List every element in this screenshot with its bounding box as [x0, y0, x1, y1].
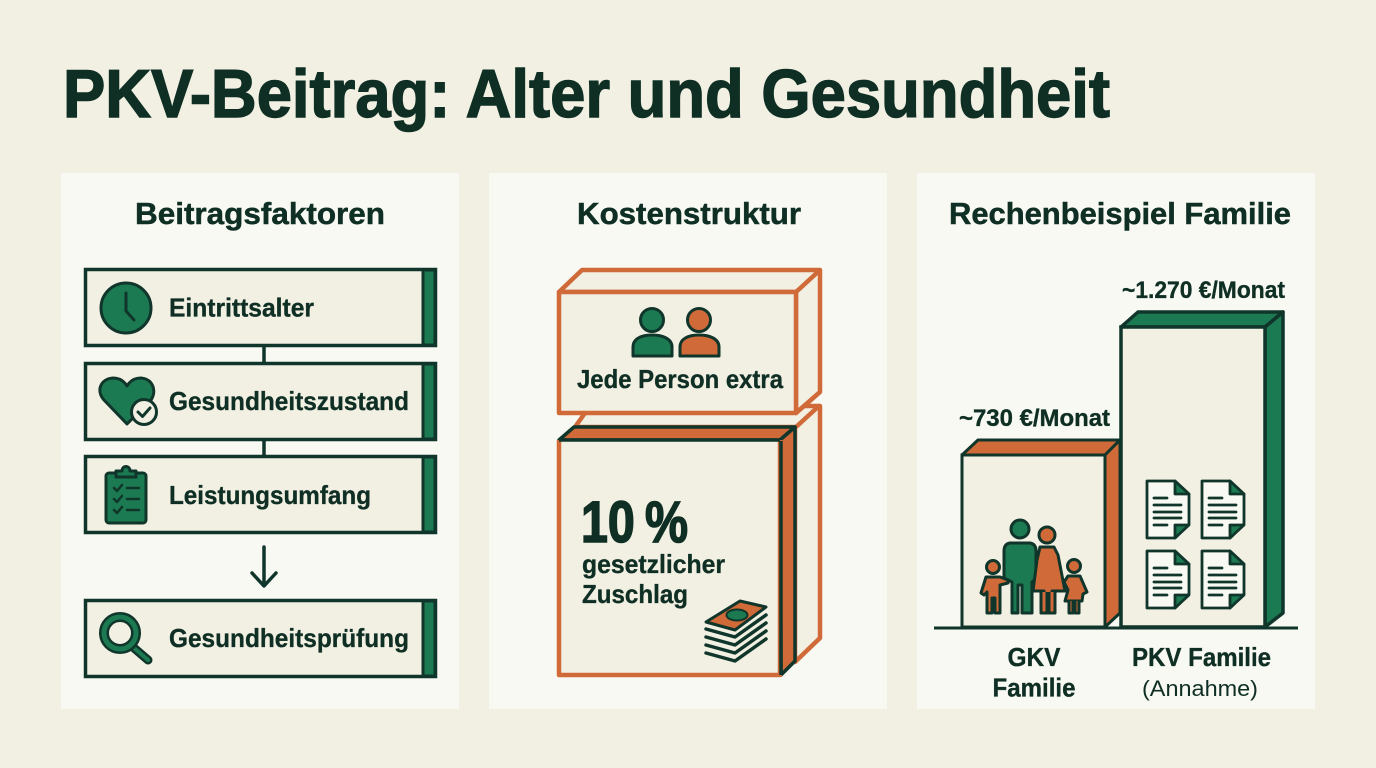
panel: Kostenstruktur: [489, 173, 887, 709]
heading: Kostenstruktur: Kostenstruktur: [577, 196, 801, 231]
icon: magnifier: [104, 617, 148, 660]
value: 10 %: 10 %: [581, 490, 688, 555]
label: GKV Familie: [992, 642, 1076, 702]
label: gesetzlicher Zuschlag: [582, 549, 725, 609]
icon: document top left: [1147, 481, 1189, 538]
icon: document bottom left: [1147, 551, 1189, 608]
icon: money stack: [706, 601, 766, 661]
icon: document bottom right: [1202, 551, 1244, 608]
factor: Gesundheitsprüfung: [86, 600, 436, 676]
icon: clipboard: [106, 466, 146, 523]
label: gesetzlicher Zuschlag: Zuschlag: [582, 579, 688, 609]
label: Gesundheitszustand: [169, 386, 409, 416]
connector lines: [262, 347, 266, 455]
icon: family: [981, 520, 1087, 613]
value: ~1.270 €/Monat: ~1.270 €/Monat: [1122, 277, 1285, 304]
panel: Beitragsfaktoren: [61, 173, 459, 709]
label: Jede Person extra: [577, 364, 783, 394]
arrow: down: [252, 547, 276, 586]
label: GKV Familie: GKV: [1008, 642, 1061, 672]
title: PKV-Beitrag: Alter und Gesundheit: [63, 56, 1110, 132]
factor: Eintrittsalter: [86, 270, 436, 346]
icon: two persons: [633, 308, 719, 356]
panel: Rechenbeispiel Familie: [917, 173, 1315, 709]
icon: heart with check: [100, 378, 156, 424]
label: GKV Familie: Familie: [992, 672, 1076, 702]
upper box: Jede Person extra: [559, 270, 820, 413]
heading: Rechenbeispiel Familie: Rechenbeispiel Familie: [949, 196, 1291, 231]
label: Gesundheitsprüfung: [169, 623, 409, 653]
label: Leistungsumfang: [169, 480, 371, 510]
label: Eintrittsalter: [169, 292, 314, 322]
value: ~730 €/Monat: ~730 €/Monat: [959, 405, 1110, 432]
icon: document top right: [1202, 481, 1244, 538]
icon: clock: [101, 283, 151, 333]
factor: Gesundheitszustand: [86, 364, 436, 440]
chart baseline: [934, 626, 1298, 630]
label: PKV Familie (Annahme): [1132, 642, 1271, 701]
heading: Beitragsfaktoren: Beitragsfaktoren: [135, 196, 385, 231]
bar: PKV: [1121, 277, 1285, 627]
label: PKV Familie (Annahme): PKV Familie: [1132, 642, 1271, 672]
label: gesetzlicher Zuschlag: gesetzlicher: [582, 549, 725, 579]
bar: GKV: [959, 405, 1120, 627]
lower box: 10 % Zuschlag: [559, 405, 820, 675]
label: PKV Familie (Annahme): (Annahme): [1142, 676, 1258, 701]
factor: Leistungsumfang: [86, 456, 436, 532]
